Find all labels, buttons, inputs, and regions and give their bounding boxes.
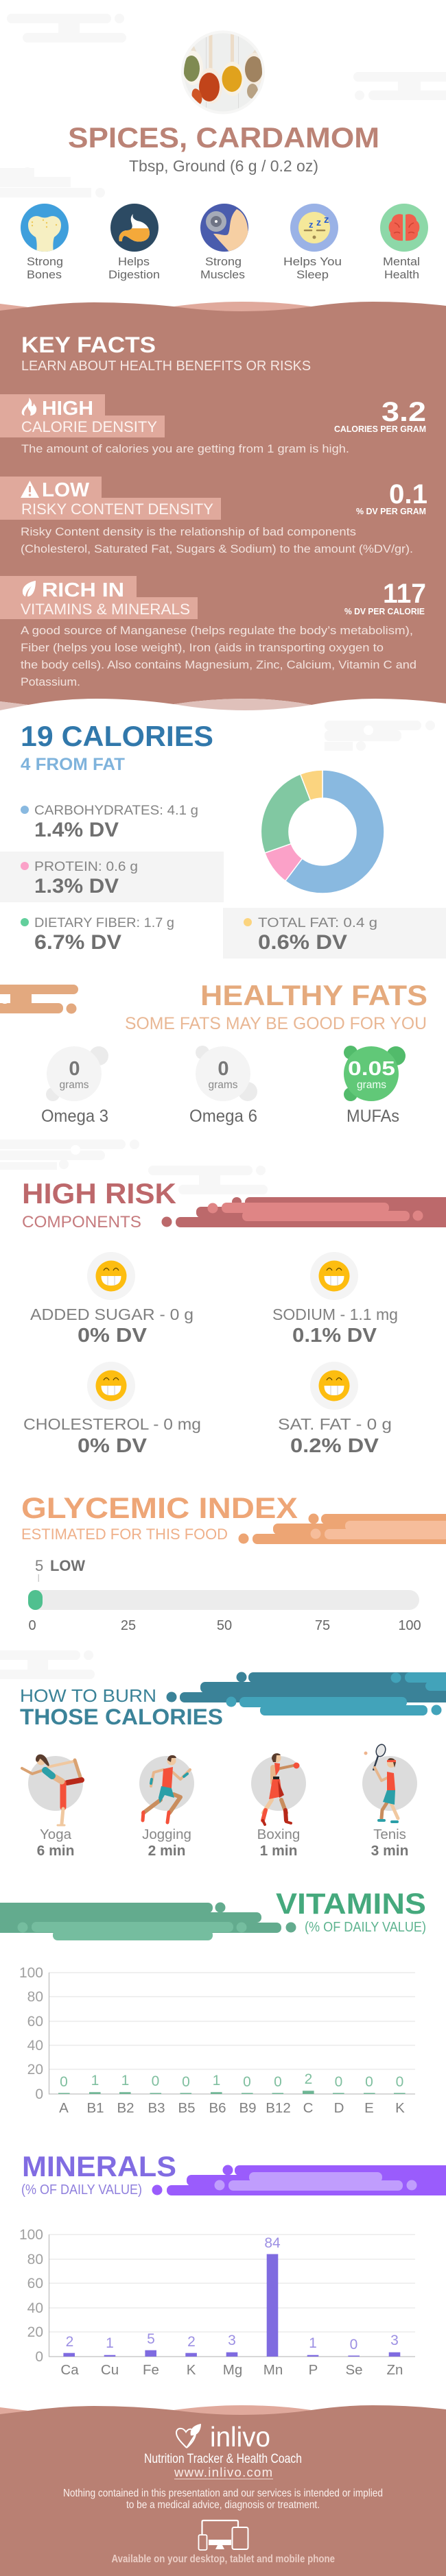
heading: vitamins: VITAMINS: [276, 1888, 426, 1921]
bar chart: vitamins: 100: [19, 1965, 43, 1981]
bar chart: minerals: 40: [27, 2300, 43, 2316]
bar chart: vitamins: B2: [117, 2100, 134, 2116]
label: strong bones: [27, 255, 63, 281]
disclaimer: to be a medical advice, diagnosis or treatment.: [126, 2499, 320, 2511]
risk item: sodium: 0.1% DV: [292, 1325, 377, 1347]
fact description: calorie density: The amount of calories you are getting from 1 gram is high.: [21, 442, 349, 455]
icon: digestion: [110, 204, 159, 252]
icon: sleep: z: [309, 219, 314, 230]
fat bubble: omega 6: grams: [208, 1079, 238, 1091]
fact value: dv per gram: 0.1: [389, 479, 427, 509]
bar chart: vitamins: 1: [213, 2073, 220, 2089]
macro: dietary fiber: [21, 915, 174, 954]
label: boxing: Boxing: [257, 1827, 300, 1842]
label: yoga: 6 min: [37, 1843, 74, 1859]
label: sleep: [283, 255, 342, 281]
fact value: dv per calorie: [344, 579, 426, 616]
bar chart: minerals: Fe: [143, 2362, 159, 2378]
macro: carbohydrates: [21, 803, 198, 841]
label: tennis: [371, 1827, 408, 1859]
decorative cloud: top right: [353, 72, 446, 100]
risk item: saturated fat: [278, 1362, 392, 1457]
fact value: dv per gram: [356, 479, 427, 516]
bar chart: minerals: 0: [35, 2349, 43, 2365]
fat bubble: MUFAs: [344, 1046, 406, 1126]
bar chart: minerals: 80: [27, 2252, 43, 2267]
bar chart: vitamins: 60: [27, 2014, 43, 2030]
bar chart: vitamins: 0: [335, 2074, 342, 2090]
fact: calorie density label: HIGH: [42, 398, 93, 420]
icon: warning: [21, 481, 39, 498]
bar chart: vitamins: 20: [27, 2062, 43, 2078]
fact description: risky content: [21, 525, 413, 555]
fat bubble: MUFAs: 0.05: [348, 1058, 395, 1080]
fat bubble: omega 3: grams: [59, 1079, 89, 1091]
bar chart: minerals: 1: [309, 2335, 317, 2351]
label: jogging: [142, 1827, 191, 1859]
macro: total fat: 0.6% DV: [258, 931, 347, 954]
bar chart: vitamins: 0: [60, 2074, 68, 2090]
icon: brain: [380, 204, 428, 252]
heading: healthy fats: HEALTHY FATS: [200, 979, 427, 1011]
heading: how to burn: HOW TO BURN: [20, 1685, 156, 1706]
label: jogging: Jogging: [142, 1827, 191, 1842]
risk item: added sugar: 0% DV: [78, 1325, 148, 1347]
label: boxing: 1 min: [260, 1843, 297, 1859]
logo: inlivo: inlivo: [210, 2421, 270, 2453]
heading: minerals: MINERALS: [22, 2150, 176, 2182]
label: digestion: Helps: [118, 255, 150, 268]
decorative cloud: high risk 1: [0, 1140, 139, 1170]
bar chart: minerals: Cu: [101, 2362, 119, 2378]
icon: strong bones: [21, 204, 69, 254]
label: yoga: [37, 1827, 74, 1859]
bar chart: vitamins: B9: [239, 2100, 257, 2116]
panel: key facts: [0, 302, 446, 710]
fact value: calories per gram: CALORIES PER GRAM: [334, 424, 426, 434]
macro: dietary fiber: 6.7% DV: [34, 931, 121, 954]
bar chart: minerals: 20: [27, 2324, 43, 2340]
subheading: glycemic index: ESTIMATED FOR THIS FOOD: [21, 1526, 228, 1543]
label: muscles: Strong: [205, 255, 242, 268]
food photo: spice spoons: [181, 30, 265, 114]
macro: protein: [0, 852, 224, 902]
availability note: Available on your desktop, tablet and mobile phone: [111, 2553, 335, 2565]
heading: calories: 19 CALORIES: [21, 720, 213, 752]
macro: protein: PROTEIN: 0.6 g: [34, 859, 138, 874]
bar chart: vitamins: 2: [305, 2071, 312, 2087]
subheading: vitamins: (% OF DAILY VALUE): [305, 1919, 426, 1935]
bar chart: minerals: 3: [390, 2333, 399, 2348]
bar chart: minerals: 1: [106, 2335, 114, 2351]
risk item: saturated fat: 0.2% DV: [290, 1435, 379, 1457]
macro: total fat: [223, 908, 446, 959]
fact description: rich in: Potassium.: [21, 675, 80, 688]
bar chart: vitamins: A: [59, 2100, 69, 2116]
bar chart: vitamins: 1: [91, 2073, 99, 2089]
label: digestion: [108, 255, 160, 281]
glycemic gauge: 50: [217, 1618, 232, 1633]
bar chart: vitamins: B1: [86, 2100, 104, 2116]
footer panel: [0, 2405, 446, 2576]
decorative cloud: high risk 2: [148, 1166, 268, 1194]
fact value: dv per gram: % DV PER GRAM: [356, 506, 426, 516]
risk item: cholesterol: 0% DV: [78, 1435, 148, 1457]
fat bubble: omega 6: [189, 1046, 257, 1126]
icon: sleep: z: [324, 214, 329, 226]
bar chart: minerals: 100: [19, 2227, 43, 2243]
heading: those calories: THOSE CALORIES: [20, 1705, 223, 1729]
bar chart: vitamins: 0: [182, 2074, 190, 2090]
heading: glycemic index: GLYCEMIC INDEX: [21, 1492, 298, 1525]
icon: sleep: [290, 204, 338, 252]
bar chart: vitamins: 0: [365, 2074, 373, 2090]
decorative cloud: top left: [7, 14, 126, 43]
label: boxing: [257, 1827, 300, 1859]
bar chart: vitamins: B12: [266, 2100, 291, 2116]
serving size: Tbsp, Ground (6 g / 0.2 oz): [129, 157, 318, 175]
bar chart: vitamins: 0: [152, 2073, 159, 2089]
heading: high risk: HIGH RISK: [22, 1177, 176, 1209]
macro: carbohydrates: 1.4% DV: [34, 819, 119, 841]
decoration: minerals bars: [152, 2165, 446, 2195]
exercise: yoga: [22, 1755, 83, 1825]
fact description: risky content: Risky Content density is the relationship of bad components: [21, 525, 356, 538]
fat bubble: omega 6: Omega 6: [189, 1107, 257, 1126]
label: brain: [383, 255, 420, 281]
fat bubble: omega 3: [41, 1046, 108, 1126]
donut chart: macronutrients: [261, 770, 384, 893]
macro: carbohydrates: CARBOHYDRATES: 4.1 g: [34, 803, 198, 818]
fat bubble: omega 3: 0: [69, 1058, 80, 1080]
bar chart: vitamins: C: [303, 2100, 314, 2116]
bar chart: minerals: Zn: [387, 2362, 403, 2378]
glycemic gauge: 0: [28, 1618, 36, 1633]
decorative cloud: left: [0, 167, 105, 197]
label: digestion: Digestion: [108, 268, 160, 281]
fact: risky content density label: RISKY CONTENT DENSITY: [21, 501, 213, 518]
risk item: sodium: SODIUM - 1.1 mg: [272, 1305, 398, 1323]
bar chart: minerals: [19, 2227, 415, 2378]
label: sleep: Helps You: [283, 255, 342, 268]
bar chart: minerals: 84: [264, 2235, 281, 2251]
exercise: jogging: [139, 1755, 194, 1822]
fact: risky content density label: [0, 477, 221, 520]
bar chart: vitamins: E: [364, 2100, 374, 2116]
risk item: cholesterol: [23, 1362, 201, 1457]
fact description: rich in: the body cells). Also contains Magnesium, Zinc, Calcium, Vitamin C and: [21, 658, 416, 671]
bar chart: minerals: Se: [345, 2362, 363, 2378]
exercise: tennis: [362, 1743, 417, 1822]
bar chart: minerals: 5: [147, 2331, 155, 2347]
icon: leaf: [23, 581, 36, 597]
bar chart: vitamins: D: [334, 2100, 344, 2116]
title: SPICES, CARDAMOM: [68, 121, 379, 154]
bar chart: vitamins: K: [395, 2100, 405, 2116]
fact description: rich in: Fiber (helps you lose weight), Iron (aids in transporting oxygen to: [21, 641, 384, 654]
label: brain: Mental: [383, 255, 420, 268]
bar chart: minerals: 2: [66, 2334, 73, 2350]
label: muscles: Muscles: [200, 268, 245, 281]
macro: dietary fiber: DIETARY FIBER: 1.7 g: [34, 915, 174, 930]
subheading: healthy fats: SOME FATS MAY BE GOOD FOR YOU: [125, 1014, 427, 1033]
label: muscles: [200, 255, 245, 281]
tagline: Nutrition Tracker & Health Coach: [144, 2452, 302, 2466]
label: jogging: 2 min: [148, 1843, 185, 1859]
disclaimer: [63, 2488, 383, 2511]
fact: calorie density label: [0, 394, 165, 437]
decorative cloud: calories: [325, 721, 435, 751]
subheading: components: COMPONENTS: [22, 1213, 141, 1231]
bar chart: minerals: K: [187, 2362, 196, 2378]
bar chart: vitamins: B6: [209, 2100, 226, 2116]
bar chart: vitamins: 40: [27, 2038, 43, 2054]
bar chart: minerals: 3: [228, 2333, 236, 2348]
glycemic gauge: [28, 1557, 421, 1633]
label: yoga: Yoga: [40, 1827, 72, 1842]
decoration: high risk bars: [162, 1197, 446, 1227]
macro: total fat: TOTAL FAT: 0.4 g: [258, 915, 377, 930]
glycemic gauge: 75: [315, 1618, 330, 1633]
bar chart: vitamins: 1: [121, 2073, 129, 2089]
exercise: boxing: [251, 1753, 306, 1825]
fact: rich in label: VITAMINS & MINERALS: [21, 601, 190, 618]
fact value: calories per gram: [334, 397, 426, 434]
fact value: dv per calorie: 117: [383, 579, 426, 609]
label: sleep: Sleep: [296, 268, 329, 281]
bar chart: vitamins: 0: [243, 2074, 251, 2090]
subheading: key facts: LEARN ABOUT HEALTH BENEFITS OR RISKS: [21, 359, 311, 374]
bar chart: minerals: 60: [27, 2276, 43, 2291]
bar chart: minerals: Mn: [263, 2362, 283, 2378]
icon: strong muscles: [200, 204, 248, 252]
bar chart: vitamins: 0: [396, 2074, 403, 2090]
bar chart: minerals: Ca: [60, 2362, 79, 2378]
bar chart: minerals: P: [309, 2362, 318, 2378]
fact: rich in label: RICH IN: [42, 579, 124, 601]
decoration: burn bars: [166, 1672, 446, 1716]
bar chart: vitamins: 80: [27, 1989, 43, 2005]
fact description: rich in: [21, 624, 416, 688]
decoration: vitamins bars: [0, 1902, 296, 1940]
website link: www.inlivo.com: [174, 2465, 272, 2479]
risk item: added sugar: [30, 1252, 193, 1347]
fat bubble: omega 3: Omega 3: [41, 1107, 108, 1126]
fact: rich in label: [0, 576, 198, 619]
label: tennis: 3 min: [371, 1843, 408, 1859]
bar chart: minerals: 0: [350, 2337, 357, 2352]
bar chart: vitamins: B5: [178, 2100, 196, 2116]
risk item: sodium: [272, 1252, 398, 1347]
bar chart: vitamins: 0: [35, 2086, 43, 2102]
fact description: risky content: (Cholesterol, Saturated Fat, Sugars & Sodium) to the amount (%DV/gr).: [21, 542, 413, 555]
glycemic gauge: 100: [398, 1618, 421, 1633]
icon: sleep: z: [316, 217, 321, 228]
subheading: minerals: (% OF DAILY VALUE): [21, 2182, 142, 2198]
decoration: healthy fats bars: [0, 985, 78, 1013]
decoration: glycemic bars: [239, 1514, 446, 1544]
fact: risky content density label: LOW: [42, 479, 90, 501]
icon: flame: [22, 398, 36, 416]
fact value: calories per gram: 3.2: [382, 397, 426, 427]
glycemic gauge: LOW: [50, 1557, 85, 1574]
heading: key facts: KEY FACTS: [21, 333, 156, 357]
bar chart: vitamins: 0: [274, 2074, 282, 2090]
risk item: saturated fat: SAT. FAT - 0 g: [278, 1415, 392, 1433]
label: strong bones: Strong: [27, 255, 63, 268]
subheading: from fat: 4 FROM FAT: [21, 755, 125, 774]
risk item: cholesterol: CHOLESTEROL - 0 mg: [23, 1415, 201, 1433]
label: brain: Health: [384, 268, 419, 281]
fat bubble: MUFAs: MUFAs: [347, 1107, 399, 1126]
bar chart: minerals: 2: [187, 2334, 196, 2350]
label: tennis: Tenis: [373, 1827, 406, 1842]
glycemic gauge: 5: [35, 1557, 43, 1574]
label: strong bones: Bones: [27, 268, 62, 281]
bar chart: vitamins: B3: [148, 2100, 165, 2116]
fact description: rich in: A good source of Manganese (helps regulate the body’s metabolism),: [21, 624, 413, 637]
glycemic gauge: 25: [121, 1618, 136, 1633]
fact value: dv per calorie: % DV PER CALORIE: [344, 606, 425, 616]
logo: inlivo: [176, 2421, 270, 2453]
macro: protein: 1.3% DV: [34, 875, 119, 898]
risk item: added sugar: ADDED SUGAR - 0 g: [30, 1305, 193, 1323]
fact: calorie density label: CALORIE DENSITY: [21, 418, 157, 435]
icon: devices: [199, 2520, 248, 2550]
bar chart: vitamins: [19, 1965, 415, 2116]
decorative cloud: burn: [0, 1650, 95, 1679]
disclaimer: Nothing contained in this presentation and our services is intended or implied: [63, 2488, 383, 2499]
bar chart: minerals: Mg: [223, 2362, 242, 2378]
fat bubble: omega 6: 0: [218, 1058, 229, 1080]
fat bubble: MUFAs: grams: [357, 1079, 386, 1091]
